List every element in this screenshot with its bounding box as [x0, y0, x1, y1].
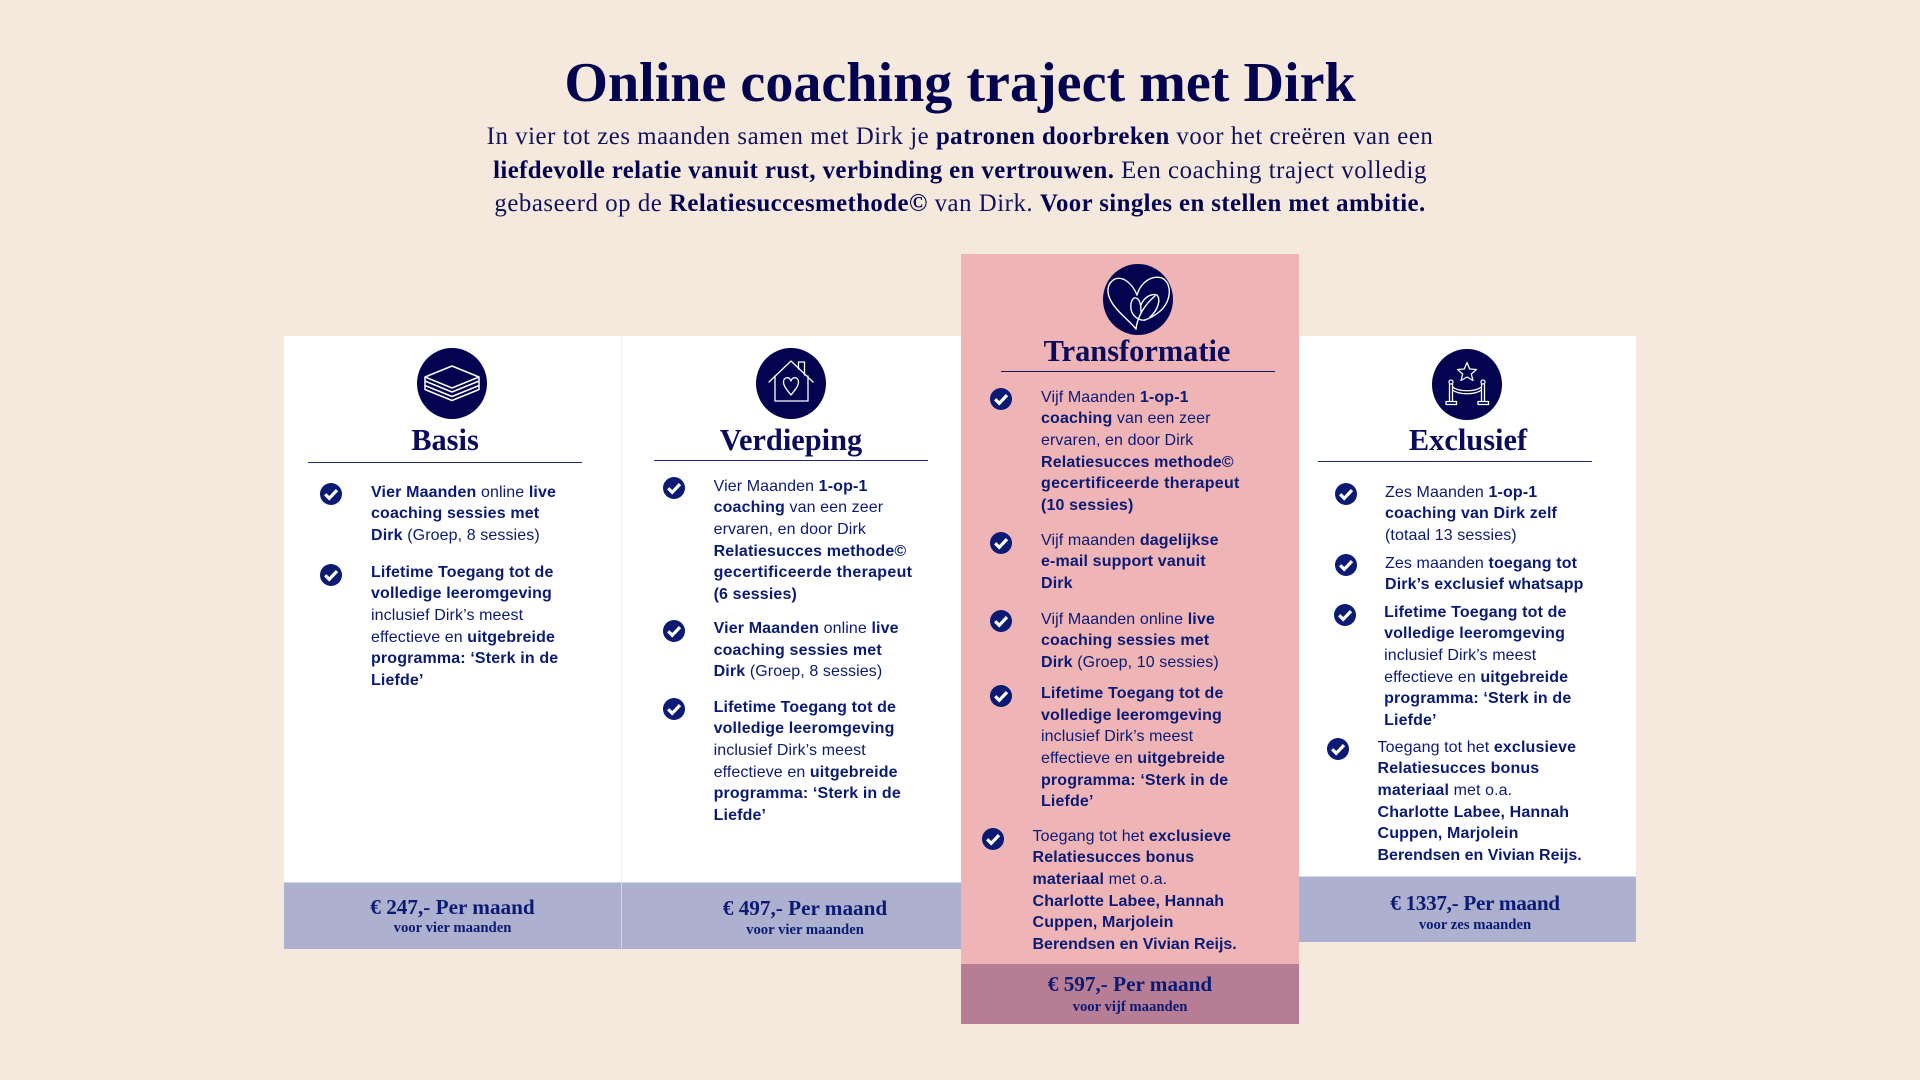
- price band: [621, 882, 961, 949]
- feature: bonus material: materiaal met o.a.: [1032, 871, 1167, 888]
- icon: hearts: [1103, 264, 1173, 335]
- feature: lifetime access: Lifetime Toegang tot de: [371, 564, 553, 581]
- heading: Verdieping: [720, 423, 862, 457]
- intro text: In vier tot zes maanden samen met Dirk je patronen doorbreken voor het creëren van een: [487, 123, 1433, 150]
- feature: live coaching: [990, 610, 1219, 671]
- feature: lifetime access: volledige leeromgeving: [714, 720, 895, 737]
- feature: bonus material: Cuppen, Marjolein: [1032, 914, 1174, 931]
- feature: lifetime access: inclusief Dirk’s meest: [1041, 728, 1193, 745]
- feature: live coaching: coaching sessies met: [714, 642, 882, 659]
- feature: live coaching: [320, 483, 556, 544]
- panel: Transformatie: [961, 254, 1299, 1024]
- price band: [961, 964, 1299, 1024]
- feature: bonus material: [982, 828, 1237, 953]
- feature: lifetime access: [320, 564, 558, 689]
- feature: e-mail support: Vijf maanden dagelijkse: [1041, 532, 1219, 549]
- intro text: [487, 123, 1433, 217]
- feature: 1-op-1 coaching: [1335, 483, 1557, 544]
- feature: live coaching: Dirk (Groep, 8 sessies): [714, 663, 882, 680]
- price duration: voor vier maanden: [746, 922, 864, 938]
- feature: lifetime access: [1334, 604, 1571, 729]
- feature: live coaching: Dirk (Groep, 10 sessies): [1041, 654, 1219, 671]
- feature: 1-op-1 coaching: gecertificeerde therapeut: [714, 564, 912, 581]
- feature: live coaching: coaching sessies met: [1041, 632, 1209, 649]
- feature: lifetime access: Lifetime Toegang tot de: [1041, 685, 1223, 702]
- feature: live coaching: Dirk (Groep, 8 sessies): [371, 527, 540, 544]
- feature: 1-op-1 coaching: Vijf Maanden 1-op-1: [1041, 389, 1189, 406]
- price: € 1337,- Per maand: [1390, 891, 1560, 915]
- panel: Verdieping: [621, 336, 961, 949]
- panel: Exclusief: [1299, 336, 1636, 942]
- heading: Transformatie: [1044, 334, 1230, 368]
- feature: lifetime access: Liefde’: [371, 672, 424, 689]
- feature: lifetime access: Lifetime Toegang tot de: [1384, 604, 1567, 621]
- feature: bonus material: Charlotte Labee, Hannah: [1378, 804, 1569, 821]
- feature: bonus material: Berendsen en Vivian Reijs.: [1032, 936, 1237, 953]
- feature: 1-op-1 coaching: coaching van een zeer: [714, 499, 883, 516]
- title: Online coaching traject met Dirk: [564, 52, 1356, 114]
- feature: 1-op-1 coaching: (6 sessies): [714, 586, 797, 603]
- feature: lifetime access: programma: ‘Sterk in de: [714, 785, 901, 802]
- divider: [654, 460, 928, 461]
- feature: lifetime access: [990, 685, 1228, 810]
- feature: live coaching: Vier Maanden online live: [371, 484, 556, 501]
- heading: Exclusief: [1409, 423, 1527, 457]
- feature: lifetime access: volledige leeromgeving: [371, 585, 552, 602]
- feature: lifetime access: inclusief Dirk’s meest: [1384, 647, 1536, 664]
- price band: [1299, 876, 1636, 942]
- feature: 1-op-1 coaching: (totaal 13 sessies): [1385, 527, 1517, 544]
- feature: bonus material: Charlotte Labee, Hannah: [1032, 893, 1224, 910]
- feature: bonus material: Cuppen, Marjolein: [1378, 825, 1519, 842]
- feature: lifetime access: volledige leeromgeving: [1041, 707, 1222, 724]
- feature: bonus material: Toegang tot het exclusieve: [1378, 739, 1576, 756]
- feature: lifetime access: Liefde’: [1041, 793, 1094, 810]
- price band: [284, 882, 621, 949]
- feature: 1-op-1 coaching: [990, 388, 1240, 514]
- price: € 497,- Per maand: [723, 896, 887, 920]
- feature: lifetime access: Liefde’: [714, 807, 766, 824]
- feature: lifetime access: Liefde’: [1384, 712, 1437, 729]
- price duration: voor vier maanden: [394, 920, 511, 936]
- feature: live coaching: Vijf Maanden online live: [1041, 611, 1215, 628]
- price: € 597,- Per maand: [1048, 972, 1212, 996]
- feature: 1-op-1 coaching: gecertificeerde therapeut: [1041, 475, 1240, 492]
- feature: live coaching: coaching sessies met: [371, 505, 539, 522]
- feature: lifetime access: programma: ‘Sterk in de: [1041, 772, 1228, 789]
- feature: whatsapp: Dirk’s exclusief whatsapp: [1385, 576, 1584, 593]
- feature: lifetime access: [663, 698, 901, 824]
- feature: 1-op-1 coaching: coaching van een zeer: [1041, 410, 1211, 427]
- feature: bonus material: materiaal met o.a.: [1378, 782, 1512, 799]
- intro text: gebaseerd op de Relatiesuccesmethode© van Dirk. Voor singles en stellen met ambitie.: [494, 190, 1426, 217]
- divider: [1318, 461, 1592, 462]
- feature: bonus material: [1327, 738, 1582, 864]
- heading: Basis: [411, 423, 479, 457]
- feature: e-mail support: e-mail support vanuit: [1041, 553, 1206, 570]
- feature: lifetime access: effectieve en uitgebreide: [371, 629, 555, 646]
- feature: 1-op-1 coaching: Vier Maanden 1-op-1: [714, 478, 868, 495]
- panel: Basis: [284, 336, 621, 949]
- divider: [308, 462, 582, 463]
- divider: [1001, 371, 1275, 372]
- feature: live coaching: [663, 620, 899, 680]
- feature: e-mail support: [990, 532, 1219, 592]
- feature: bonus material: Relatiesucces bonus: [1378, 760, 1539, 777]
- feature: whatsapp: [1335, 554, 1584, 593]
- feature: bonus material: Toegang tot het exclusieve: [1032, 828, 1231, 845]
- icon: house with heart: [756, 348, 826, 419]
- price duration: voor zes maanden: [1419, 917, 1531, 933]
- feature: lifetime access: effectieve en uitgebreide: [1041, 750, 1225, 767]
- intro text: liefdevolle relatie vanuit rust, verbinding en vertrouwen. Een coaching traject volledig: [493, 156, 1427, 184]
- icon: star and rope barrier: [1432, 349, 1502, 420]
- price: € 247,- Per maand: [370, 895, 535, 919]
- feature: 1-op-1 coaching: ervaren, en door Dirk: [714, 521, 866, 538]
- feature: lifetime access: programma: ‘Sterk in de: [371, 650, 558, 667]
- feature: 1-op-1 coaching: [663, 477, 912, 603]
- feature: lifetime access: volledige leeromgeving: [1384, 625, 1565, 642]
- feature: 1-op-1 coaching: Zes Maanden 1-op-1: [1385, 484, 1537, 501]
- feature: lifetime access: Lifetime Toegang tot de: [714, 699, 896, 716]
- feature: 1-op-1 coaching: ervaren, en door Dirk: [1041, 432, 1193, 449]
- feature: lifetime access: effectieve en uitgebreide: [714, 764, 898, 781]
- price duration: voor vijf maanden: [1073, 999, 1187, 1015]
- feature: live coaching: Vier Maanden online live: [714, 620, 899, 637]
- feature: whatsapp: Zes maanden toegang tot: [1385, 555, 1577, 572]
- feature: bonus material: Relatiesucces bonus: [1032, 849, 1194, 866]
- feature: lifetime access: effectieve en uitgebreide: [1384, 669, 1568, 686]
- feature: lifetime access: inclusief Dirk’s meest: [714, 742, 866, 759]
- feature: 1-op-1 coaching: (10 sessies): [1041, 497, 1133, 514]
- feature: 1-op-1 coaching: coaching van Dirk zelf: [1385, 505, 1557, 522]
- feature: bonus material: Berendsen en Vivian Reijs.: [1378, 847, 1582, 864]
- feature: lifetime access: inclusief Dirk’s meest: [371, 607, 523, 624]
- icon: stack of layers: [417, 348, 487, 419]
- feature: lifetime access: programma: ‘Sterk in de: [1384, 690, 1571, 707]
- feature: 1-op-1 coaching: Relatiesucces methode©: [714, 543, 906, 560]
- feature: 1-op-1 coaching: Relatiesucces methode©: [1041, 454, 1234, 471]
- feature: e-mail support: Dirk: [1041, 575, 1073, 592]
